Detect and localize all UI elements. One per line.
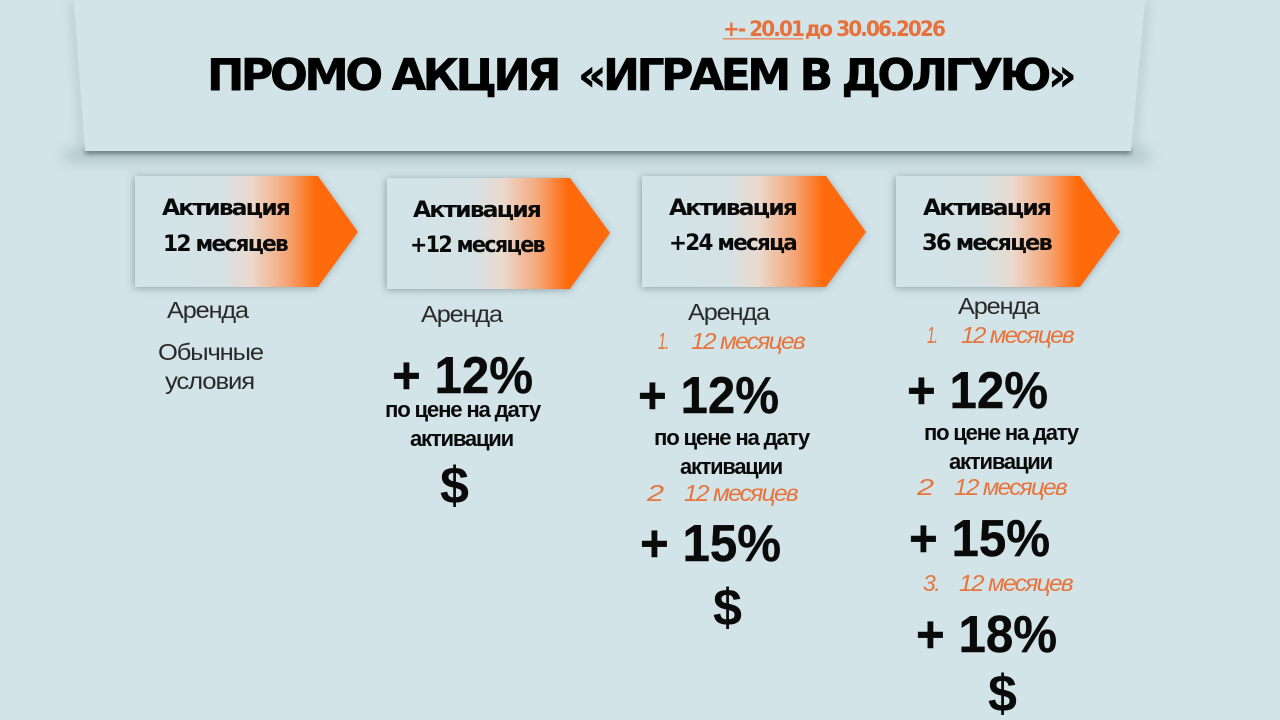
regular terms xyxy=(158,339,263,394)
arrow: activation 12 months xyxy=(135,176,358,287)
date range: +- 20.01 xyxy=(723,17,804,41)
surcharge 15%: + 15% xyxy=(909,510,1050,568)
rent label: Аренда xyxy=(421,301,503,327)
arrow: activation +12 months: Активация xyxy=(413,198,541,223)
arrow: activation 12 months: 12 месяцев xyxy=(163,232,288,257)
surcharge 12%: + 12% xyxy=(907,362,1048,420)
dollar sign: $ xyxy=(713,579,742,637)
price note: активации xyxy=(680,454,782,479)
rent label: Аренда xyxy=(958,293,1040,319)
period 1: 12 месяцев xyxy=(691,328,806,354)
date range xyxy=(723,17,945,41)
period 1: 1. xyxy=(927,322,937,348)
column 1: 12 months xyxy=(135,176,358,394)
surcharge 12%: + 12% xyxy=(638,367,779,425)
column 3: +24 months xyxy=(638,176,866,637)
column 2: +12 months xyxy=(385,178,610,515)
arrow: activation 36 months: 36 месяцев xyxy=(922,231,1052,256)
header panel xyxy=(65,0,1150,162)
price note xyxy=(654,425,811,479)
period 2 xyxy=(916,474,1068,500)
regular terms: Обычные xyxy=(158,339,263,365)
arrow: activation +12 months xyxy=(387,178,610,289)
rent label: Аренда xyxy=(167,297,249,323)
title xyxy=(207,50,1074,101)
price note xyxy=(924,420,1080,474)
arrow: activation 36 months xyxy=(896,176,1120,287)
period 2: 12 месяцев xyxy=(684,480,799,506)
dollar sign: $ xyxy=(440,457,469,515)
arrow: activation +24 months xyxy=(642,176,866,287)
title: «ИГРАЕМ В ДОЛГУЮ» xyxy=(578,50,1074,101)
price note: активации xyxy=(410,426,513,451)
arrow: activation +24 months: Активация xyxy=(669,196,797,221)
price note: активации xyxy=(949,449,1052,474)
surcharge 18%: + 18% xyxy=(916,606,1057,664)
column 4: 36 months xyxy=(896,176,1120,720)
price note: по цене на дату xyxy=(654,425,811,450)
surcharge 12%: + 12% xyxy=(392,347,533,405)
date range: до 30.06.2026 xyxy=(805,17,945,41)
period 2: 2 xyxy=(916,474,934,500)
title: ПРОМО АКЦИЯ xyxy=(207,50,558,101)
period 2: 12 месяцев xyxy=(954,474,1068,500)
regular terms: условия xyxy=(165,368,254,394)
surcharge 15%: + 15% xyxy=(640,515,781,573)
price note xyxy=(385,397,542,451)
price note: по цене на дату xyxy=(924,420,1080,445)
period 1: 1. xyxy=(658,328,668,354)
price note: по цене на дату xyxy=(385,397,542,422)
arrow: activation 12 months: Активация xyxy=(162,196,290,221)
arrow: activation +12 months: +12 месяцев xyxy=(410,233,545,258)
period 3: 12 месяцев xyxy=(959,570,1074,596)
period 3: 3. xyxy=(923,570,939,596)
rent label: Аренда xyxy=(688,299,770,325)
period 2 xyxy=(646,480,799,506)
period 1: 12 месяцев xyxy=(961,322,1075,348)
period 2: 2 xyxy=(646,480,664,506)
arrow: activation +24 months: +24 месяца xyxy=(669,231,797,256)
arrow: activation 36 months: Активация xyxy=(923,196,1051,221)
